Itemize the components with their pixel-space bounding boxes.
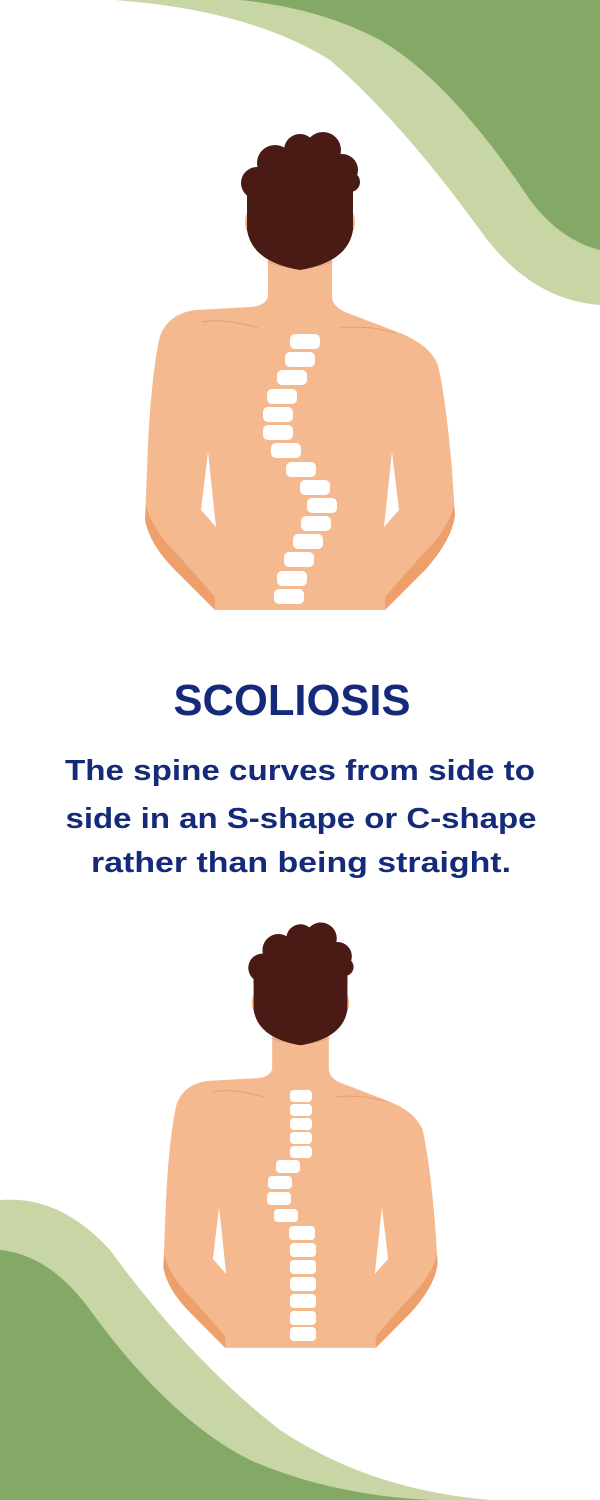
description text: The spine curves from side to — [65, 755, 535, 787]
spine: curved vertebrae — [263, 334, 337, 604]
title: SCOLIOSIS — [174, 676, 410, 725]
description text: rather than being straight. — [91, 847, 511, 879]
description text — [65, 755, 536, 879]
illustration: bottom figure with lower curved spine — [163, 922, 438, 1348]
illustration: top figure with S-curved spine — [145, 132, 455, 610]
decoration: top-right green waves — [115, 0, 600, 305]
spine: lower curve vertebrae — [267, 1090, 316, 1341]
decoration: bottom-left green waves — [0, 1200, 490, 1500]
description text: side in an S-shape or C-shape — [66, 803, 536, 835]
